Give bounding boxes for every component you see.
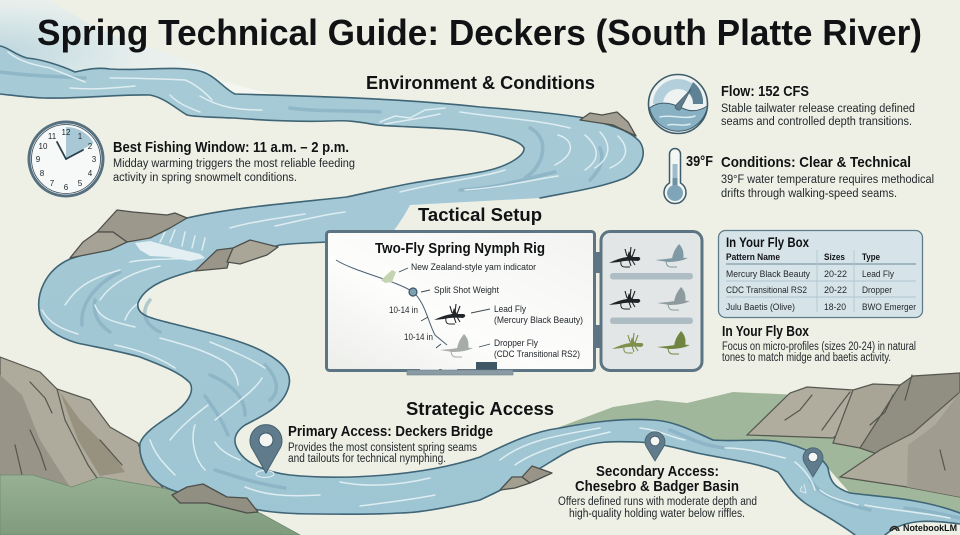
- panel: fly box with six flies: [595, 232, 702, 370]
- rig labels: (Mercury Black Beauty): [494, 315, 583, 326]
- table column headers: Pattern Name: [726, 252, 780, 263]
- text block: fly box advice: Focus on micro-profiles (sizes 20-24) in natural: [722, 341, 916, 353]
- left mountains: [0, 357, 165, 510]
- label: water temperature: 39°F: [686, 153, 713, 170]
- text block: conditions: drifts through walking-speed seams.: [721, 188, 897, 200]
- text block: best fishing window: activity in spring snowmelt conditions.: [113, 172, 297, 184]
- icon: primary access pin: [250, 425, 282, 478]
- table column headers: Type: [862, 252, 880, 263]
- lead fly illustration: [434, 304, 465, 324]
- icon: clock: [29, 122, 103, 196]
- text block: secondary access: [558, 463, 757, 520]
- rocks: [70, 112, 636, 513]
- dropper fly illustration: [440, 334, 473, 357]
- heading: environment and conditions: Environment & Conditions: [366, 72, 595, 93]
- rig labels: Lead Fly: [494, 304, 526, 315]
- text block: primary access: Provides the most consistent spring seams: [288, 442, 477, 454]
- table rows: CDC Transitional RS2: [726, 285, 807, 296]
- heading: strategic access: Strategic Access: [406, 398, 554, 419]
- text block: fly box advice: In Your Fly Box: [722, 323, 810, 340]
- text block: flow: Stable tailwater release creating defined: [721, 103, 915, 115]
- text block: best fishing window: Best Fishing Window: 11 a.m. – 2 p.m.: [113, 139, 349, 156]
- rapids: [135, 241, 205, 261]
- left green hillside: [0, 475, 300, 535]
- table rows: Julu Baetis (Olive): [726, 302, 795, 313]
- icon: clock: 2: [88, 142, 93, 151]
- icon: clock: 5: [78, 179, 83, 188]
- text block: flow: seams and controlled depth transitions.: [721, 116, 912, 128]
- text block: primary access: and tailouts for technical nymphing.: [288, 453, 446, 465]
- table column headers: Sizes: [824, 252, 845, 263]
- table heading: In Your Fly Box: [726, 235, 809, 250]
- panel: two-fly nymph rig whiteboard: [326, 232, 594, 375]
- table rows: 18-20: [824, 302, 846, 313]
- icon: flow gauge: [648, 74, 708, 134]
- icon: clock: 12: [62, 128, 71, 137]
- text block: secondary access: Offers defined runs with moderate depth and: [558, 496, 757, 508]
- rig labels: [389, 262, 583, 360]
- title: Spring Technical Guide: Deckers (South Platte River): [37, 12, 922, 53]
- icon: clock: 10: [39, 142, 48, 151]
- table column headers: [726, 252, 880, 263]
- text block: fly box advice: tones to match midge and baetis activity.: [722, 352, 891, 364]
- text block: best fishing window: Midday warming triggers the most reliable feeding: [113, 158, 355, 170]
- table rows: BWO Emerger: [862, 302, 917, 313]
- icon: thermometer: [664, 148, 686, 204]
- snow-covered slope: [0, 0, 275, 96]
- text block: conditions: Conditions: Clear & Technical: [721, 154, 911, 171]
- text block: secondary access: Secondary Access:: [596, 463, 719, 480]
- table rows: Mercury Black Beauty: [726, 269, 810, 280]
- leader line with indicator and split shot: [336, 260, 447, 345]
- text block: fly box advice: [722, 323, 916, 364]
- icon: clock: 4: [88, 169, 93, 178]
- rig heading: Two-Fly Spring Nymph Rig: [375, 240, 545, 257]
- rig labels: Dropper Fly: [494, 338, 538, 349]
- text block: primary access: Primary Access: Deckers Bridge: [288, 423, 493, 440]
- text block: primary access: [288, 423, 493, 465]
- text block: conditions: 39°F water temperature requires methodical: [721, 174, 934, 186]
- text block: secondary access: Chesebro & Badger Basin: [575, 478, 739, 495]
- rig labels: Split Shot Weight: [434, 285, 499, 296]
- table rows: 20-22: [824, 285, 847, 296]
- table rows: Lead Fly: [862, 269, 894, 280]
- icon: clock: 11: [48, 132, 57, 141]
- icon: clock: 9: [36, 155, 41, 164]
- rig labels: 10-14 in: [389, 305, 418, 316]
- heading: tactical setup: Tactical Setup: [418, 204, 542, 225]
- table rows: Dropper: [862, 285, 893, 296]
- rig labels: New Zealand-style yam indicator: [411, 262, 537, 273]
- rig labels: (CDC Transitional RS2): [494, 349, 580, 360]
- icon: clock: 3: [92, 155, 97, 164]
- rig labels: 10-14 in: [404, 332, 433, 343]
- icon: clock: 7: [50, 179, 55, 188]
- table: in your fly box: [718, 230, 922, 318]
- text block: best fishing window: [113, 139, 355, 184]
- icon: clock: 8: [40, 169, 45, 178]
- icon: secondary access pin: [645, 432, 665, 461]
- table rows: 20-22: [824, 269, 847, 280]
- icon: third access pin: [800, 448, 823, 493]
- table rows: [726, 269, 917, 313]
- text block: flow: Flow: 152 CFS: [721, 83, 809, 100]
- text block: conditions: [721, 154, 934, 200]
- text block: flow: [721, 83, 915, 128]
- right green hills: [557, 392, 960, 515]
- icon: clock: 6: [64, 183, 69, 192]
- icon: clock: 1: [78, 132, 83, 141]
- watermark: NotebookLM: NotebookLM: [903, 523, 957, 534]
- right mountains: [747, 373, 960, 497]
- text block: secondary access: high-quality holding water below riffles.: [569, 508, 745, 520]
